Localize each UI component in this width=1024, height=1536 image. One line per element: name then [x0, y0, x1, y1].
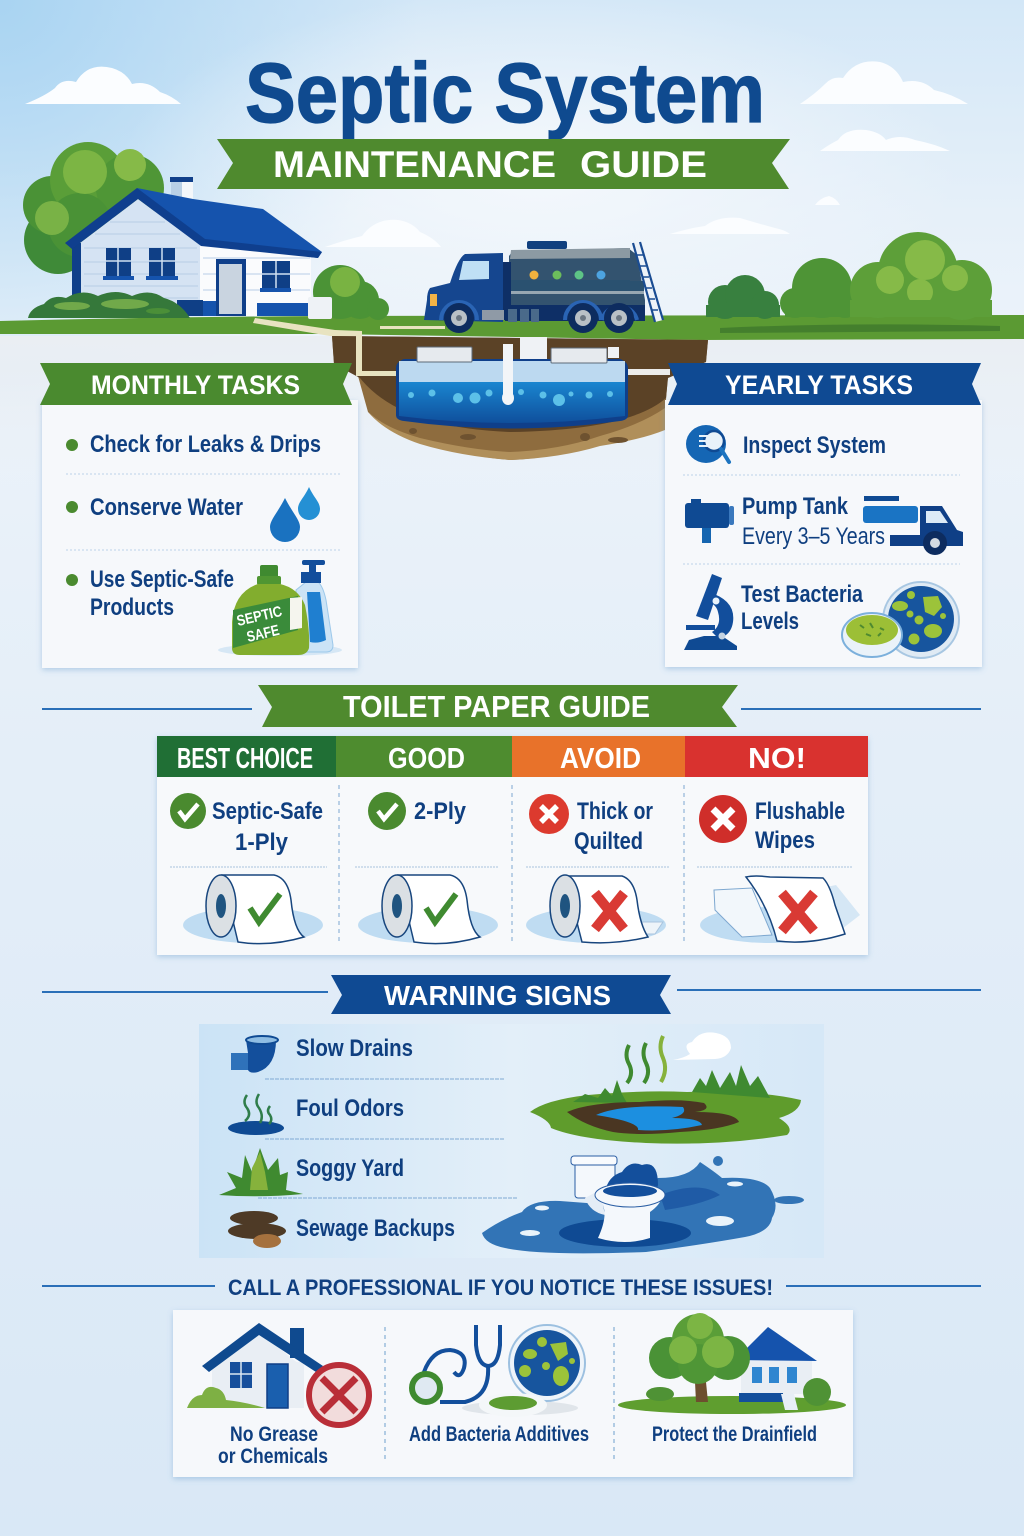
right bushes	[706, 232, 992, 320]
icon: inspect magnifier	[686, 425, 729, 463]
task: pump tank	[742, 493, 885, 550]
tip: protect the drainfield: Protect the Drainfield	[652, 1423, 817, 1446]
column: no: Wipes	[755, 827, 815, 854]
tip: add bacteria additives	[409, 1325, 589, 1446]
task: check for leaks: Check for Leaks & Drips	[90, 431, 321, 458]
icon: small pump truck	[863, 496, 963, 555]
column: no: NO!	[748, 743, 806, 775]
column: good	[336, 736, 512, 944]
task: test bacteria: Test Bacteria	[741, 581, 864, 608]
column: avoid: Thick or	[577, 798, 653, 825]
subtitle banner: GUIDE	[580, 144, 707, 185]
task: pump tank: Pump Tank	[742, 493, 849, 520]
tip: no grease or chemicals: No Grease	[230, 1423, 318, 1446]
section rule: toilet paper	[42, 708, 981, 710]
yearly tasks heading	[668, 363, 981, 405]
heading: warning signs: WARNING SIGNS	[384, 980, 611, 1011]
tree behind house	[23, 142, 164, 274]
icon: microscope	[684, 574, 737, 650]
column: good: GOOD	[388, 743, 465, 775]
subtitle banner	[217, 139, 790, 189]
section rule: call a professional	[42, 1285, 981, 1287]
icon: foul odor puddle	[228, 1094, 284, 1135]
heading: toilet paper guide: TOILET PAPER GUIDE	[343, 689, 650, 724]
task: conserve water: Conserve Water	[90, 494, 243, 521]
column: best choice: BEST CHOICE	[177, 743, 313, 775]
tip: no grease or chemicals	[187, 1323, 369, 1468]
tip: add bacteria additives: Add Bacteria Additives	[409, 1423, 589, 1446]
warning: slow drains: Slow Drains	[296, 1035, 413, 1062]
ground strip	[0, 315, 1024, 340]
icon: septic-safe bottles	[218, 560, 342, 656]
task: inspect system: Inspect System	[743, 432, 886, 459]
yearly tasks heading: YEARLY TASKS	[725, 370, 913, 400]
warning: sewage backups: Sewage Backups	[296, 1215, 455, 1242]
task: pump tank: Every 3–5 Years	[742, 523, 885, 550]
icon: septic-safe bottles: SAFE	[245, 622, 281, 646]
icon: petri dishes	[842, 582, 959, 658]
panel: yearly tasks	[665, 363, 982, 667]
section rule: warning signs	[42, 990, 981, 992]
task: septic-safe products: Products	[90, 594, 174, 621]
tip: protect the drainfield	[618, 1313, 846, 1446]
column: good: 2-Ply	[414, 798, 467, 825]
column: avoid	[512, 736, 685, 943]
heading: warning signs	[331, 975, 671, 1014]
task: septic-safe products: Use Septic-Safe	[90, 566, 234, 593]
column: no: Flushable	[755, 798, 845, 825]
clouds	[25, 61, 968, 247]
column: best choice: 1-Ply	[235, 829, 289, 856]
callout: call a professional: CALL A PROFESSIONAL IF YOU NOTICE THESE ISSUES!	[228, 1275, 773, 1300]
column: avoid: AVOID	[560, 743, 641, 775]
septic pit and soil	[332, 336, 708, 460]
icon: sewage mud	[228, 1211, 286, 1248]
panel: warning signs	[199, 1024, 824, 1258]
tree right of house	[313, 265, 389, 320]
column: avoid: Quilted	[574, 828, 643, 855]
task: septic-safe products	[66, 566, 234, 621]
subtitle banner: MAINTENANCE	[273, 144, 556, 185]
task: test bacteria	[741, 581, 864, 635]
illustration: sewage backup toilet	[482, 1156, 804, 1253]
heading: toilet paper guide	[258, 685, 738, 727]
tip: no grease or chemicals: or Chemicals	[218, 1445, 328, 1468]
house	[65, 177, 332, 319]
warning: soggy yard: Soggy Yard	[296, 1155, 404, 1182]
pipes	[253, 318, 670, 376]
pump truck	[424, 241, 663, 333]
monthly tasks heading: MONTHLY TASKS	[91, 370, 300, 400]
illustration: soggy yard scene	[530, 1032, 801, 1144]
warning: foul odors: Foul Odors	[296, 1095, 404, 1122]
title: Septic System	[245, 46, 765, 140]
panel: toilet paper table	[157, 736, 868, 955]
column: no	[685, 736, 868, 943]
hedge in front of house	[28, 292, 190, 318]
septic tank	[396, 337, 628, 428]
icon: grass tuft	[219, 1148, 303, 1196]
icon: slow drain pipe	[231, 1036, 278, 1073]
panel: monthly tasks	[40, 363, 358, 668]
column: best choice	[157, 736, 336, 944]
icon: water drops	[270, 487, 320, 542]
icon: septic-safe bottles: SEPTIC	[235, 603, 284, 630]
column: best choice: Septic-Safe	[212, 798, 323, 825]
panel: prevention tips	[173, 1310, 853, 1477]
monthly tasks heading	[40, 363, 352, 405]
icon: pump	[685, 499, 734, 543]
task: test bacteria: Levels	[741, 608, 799, 635]
